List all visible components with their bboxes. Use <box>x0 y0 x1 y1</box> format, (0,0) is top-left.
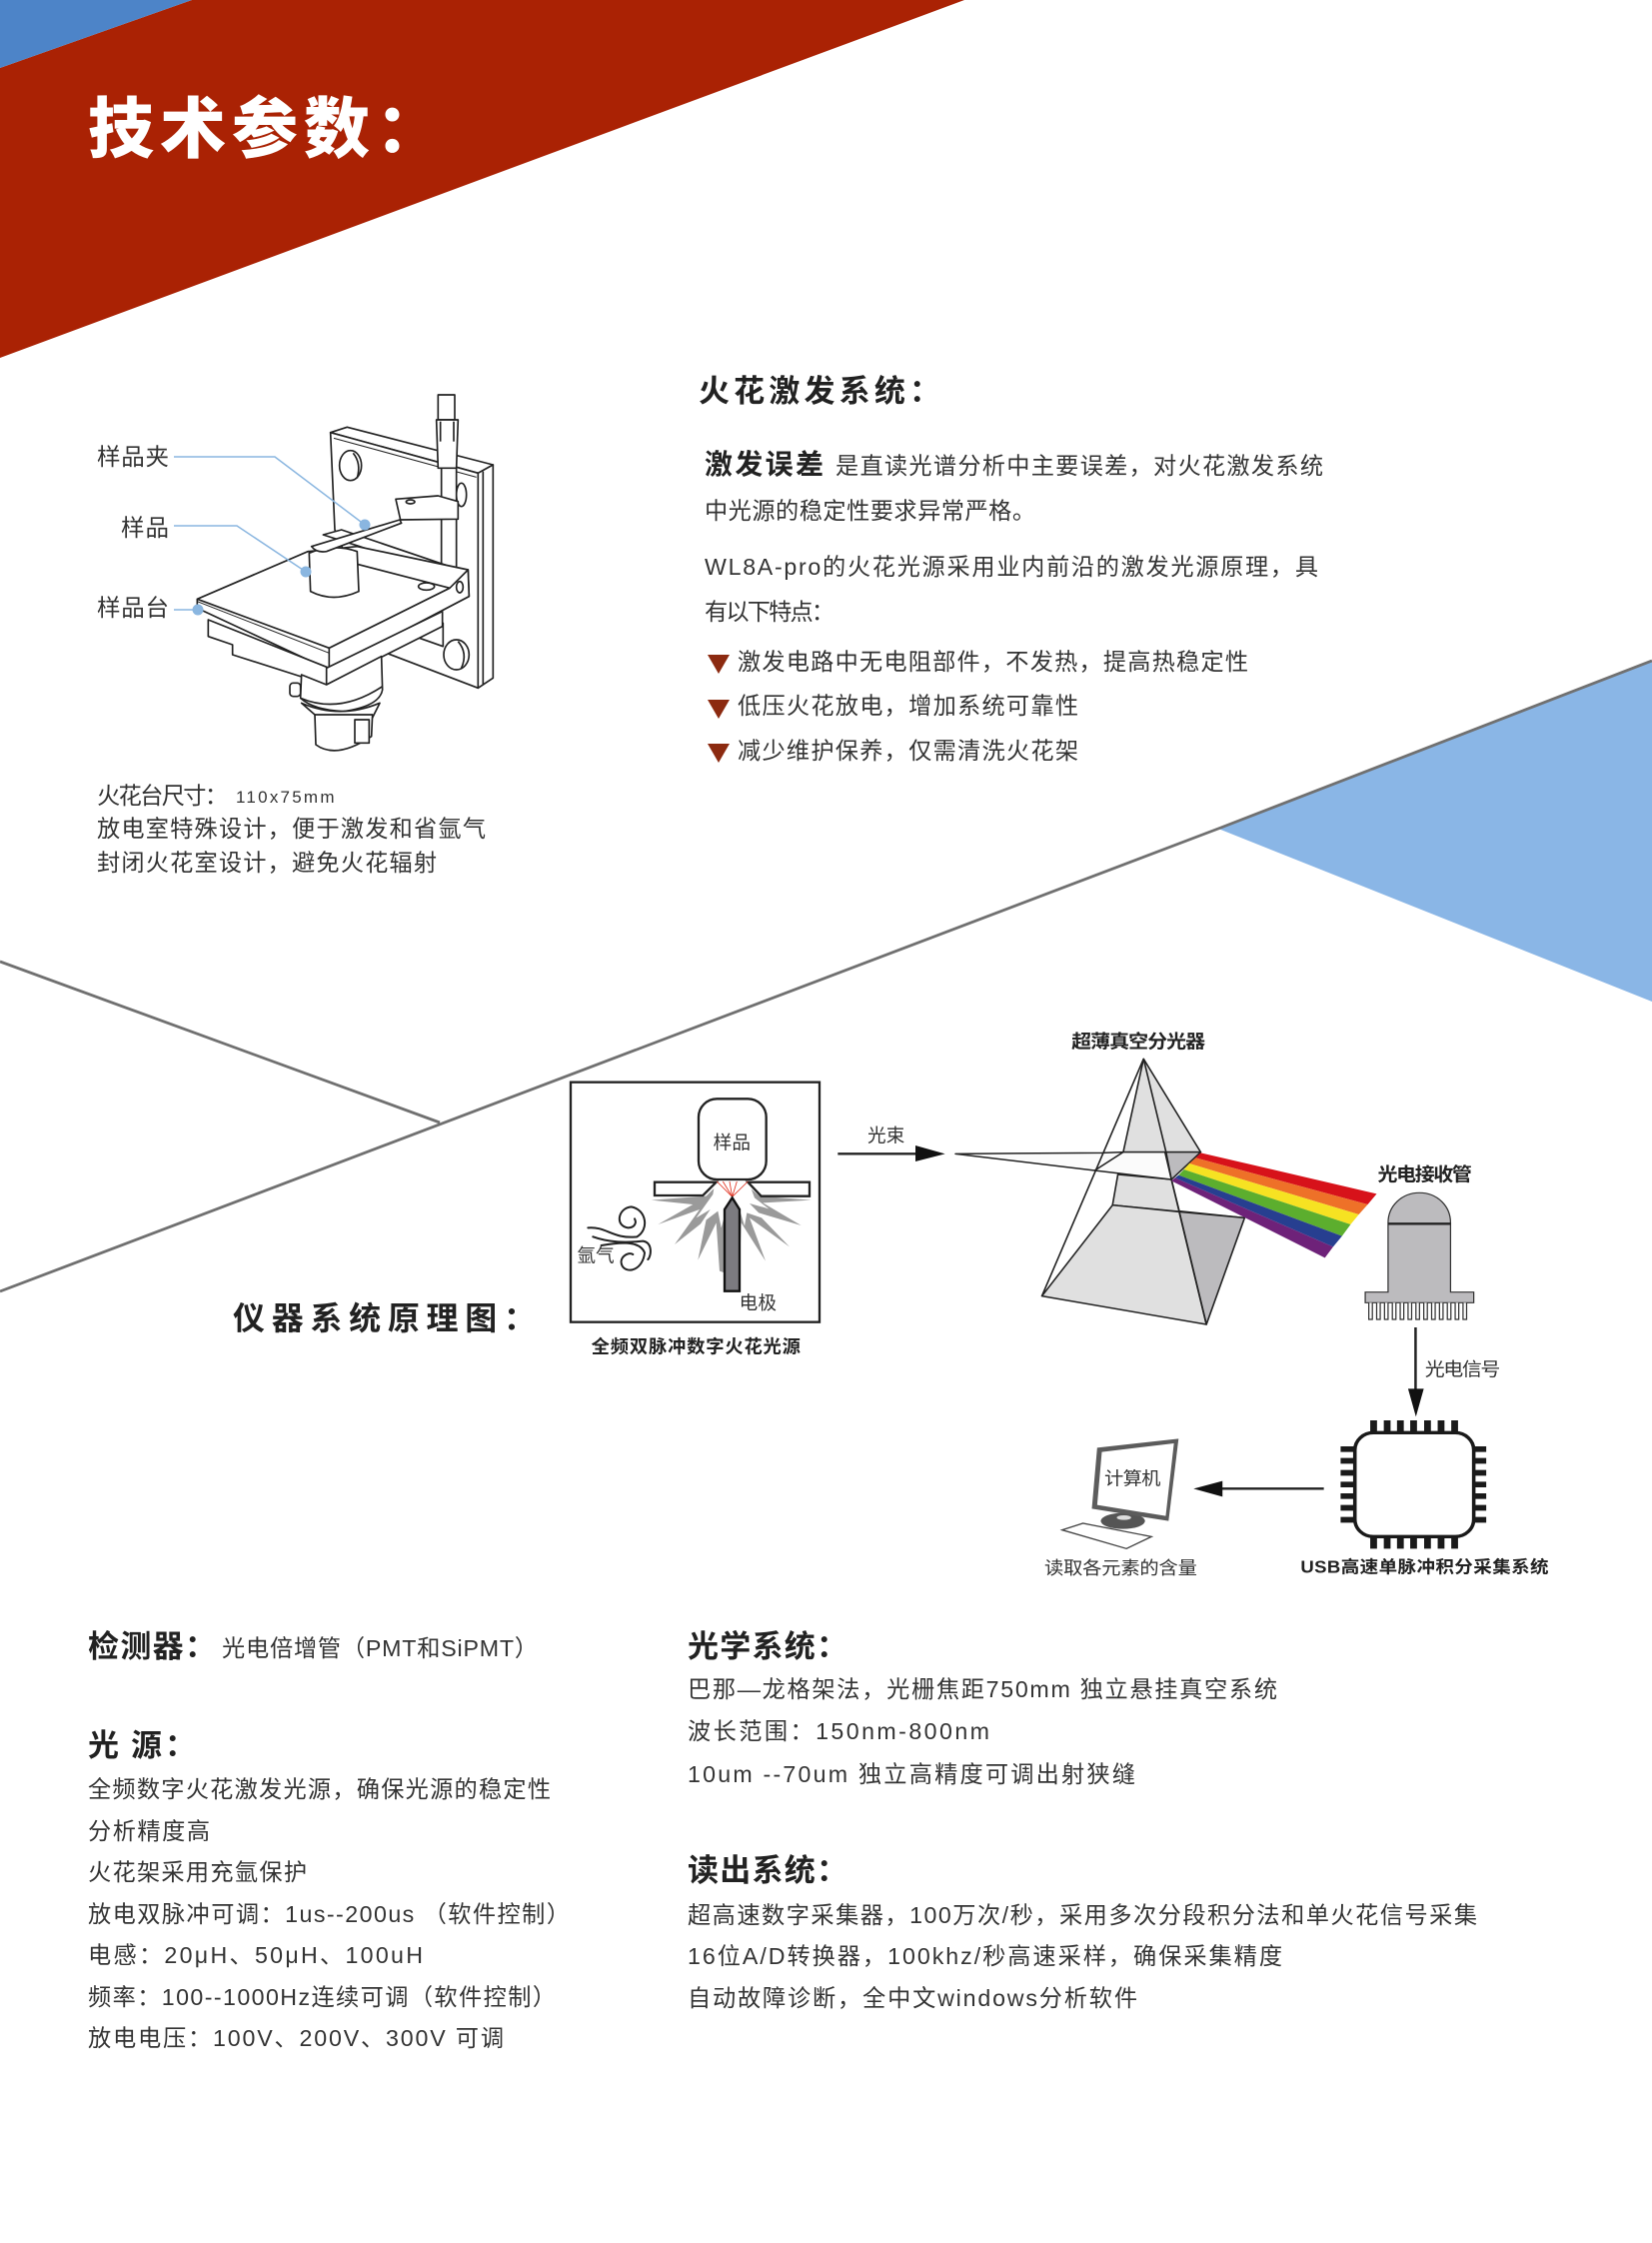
text block: readout: 超高速数字采集器，100万次/秒，采用多次分段积分法和单火花信号采集 <box>688 1902 1477 1928</box>
heading: light source: 光源： <box>88 1728 196 1763</box>
panel: detector and light source specs <box>88 1629 570 2051</box>
source box <box>571 1083 820 1322</box>
text block: optics: 巴那—龙格架法，光栅焦距750mm 独立悬挂真空系统 <box>688 1676 1277 1702</box>
text block: light source: 全频数字火花激发光源，确保光源的稳定性 <box>88 1776 551 1802</box>
panel: spark source <box>571 1083 820 1357</box>
arrow: to computer <box>1193 1481 1324 1496</box>
text block: intro: 有以下特点： <box>705 599 834 625</box>
callout: sample stage: 样品台 <box>97 595 169 621</box>
arrow: light beam <box>837 1125 945 1161</box>
callout: sample stage <box>97 595 204 621</box>
arrow: light beam: 光束 <box>867 1125 905 1146</box>
panel: optical and readout specs <box>688 1629 1477 2011</box>
argon gas: 氩气 <box>577 1245 615 1266</box>
background shapes <box>0 0 1652 1291</box>
text block: light source: 电感：20μH、50μH、100uH <box>88 1942 423 1968</box>
text block: intro: 是直读光谱分析中主要误差，对火花激发系统 <box>835 453 1323 479</box>
text block: light source <box>88 1776 570 2051</box>
computer <box>1044 1438 1197 1578</box>
rainbow <box>1171 1152 1376 1257</box>
text block: light source: 火花架采用充氩保护 <box>88 1859 307 1885</box>
heading: readout: 读出系统： <box>688 1853 847 1888</box>
title: 技术参数： <box>88 92 442 166</box>
arrow: photoelectric signal <box>1408 1327 1500 1416</box>
computer: 读取各元素的含量 <box>1044 1558 1197 1578</box>
argon gas <box>577 1206 651 1270</box>
caption: spark stand specs: 放电室特殊设计，便于激发和省氩气 <box>97 816 486 842</box>
text block: light source: 放电电压：100V、200V、300V 可调 <box>88 2025 504 2051</box>
list: features: 激发电路中无电阻部件，不发热，提高热稳定性 <box>738 649 1248 675</box>
caption: spark stand specs: 110x75mm <box>236 788 336 807</box>
electrode: 电极 <box>740 1292 777 1313</box>
prism <box>955 1059 1244 1324</box>
chip: USB高速单脉冲积分采集系统 <box>1300 1556 1549 1576</box>
caption: spark stand specs <box>97 783 486 876</box>
text block: readout: 16位A/D转换器，100khz/秒高速采样，确保采集精度 <box>688 1943 1282 1969</box>
text block: intro: WL8A-pro的火花光源采用业内前沿的激发光源原理，具 <box>705 554 1318 580</box>
chip <box>1300 1420 1549 1576</box>
text block: readout <box>688 1902 1477 2011</box>
prism heading: 超薄真空分光器 <box>1071 1031 1206 1053</box>
heading: 火花激发系统： <box>699 374 940 409</box>
heading: detector: 检测器： <box>88 1629 216 1664</box>
list: features: 减少维护保养，仅需清洗火花架 <box>738 738 1078 764</box>
text block: intro: 中光源的稳定性要求异常严格。 <box>705 498 1035 524</box>
text block: intro <box>705 449 1323 625</box>
caption: spark stand specs: 火花台尺寸： <box>97 783 228 809</box>
text block: readout: 自动故障诊断，全中文windows分析软件 <box>688 1985 1137 2011</box>
detector: 光电接收管 <box>1378 1163 1472 1185</box>
text block: light source: 分析精度高 <box>88 1818 210 1844</box>
callout: sample clamp <box>97 444 370 530</box>
list: features <box>708 649 1248 764</box>
panel: spectrometer prism <box>955 1031 1474 1324</box>
source label: 全频双脉冲数字火花光源 <box>592 1336 802 1357</box>
text: detector type: 光电倍增管（PMT和SiPMT） <box>222 1635 538 1661</box>
sample block <box>699 1099 767 1179</box>
list: features: 低压火花放电，增加系统可靠性 <box>738 693 1078 719</box>
spark rays <box>717 1181 748 1196</box>
arrow: photoelectric signal: 光电信号 <box>1425 1359 1500 1380</box>
text block: optics: 波长范围：150nm-800nm <box>688 1718 989 1744</box>
text block: optics <box>688 1676 1277 1787</box>
stage plate <box>655 1182 810 1196</box>
spark burst <box>652 1184 812 1272</box>
callout: sample: 样品 <box>121 515 169 541</box>
sample block: 样品 <box>714 1131 751 1152</box>
text block: intro: 激发误差 <box>705 449 824 480</box>
heading: optics: 光学系统： <box>688 1629 847 1664</box>
detector <box>1365 1163 1474 1319</box>
panel: acquisition and computer <box>1044 1327 1549 1578</box>
text block: light source: 放电双脉冲可调：1us--200us （软件控制） <box>88 1901 570 1927</box>
panel: spark excitation system <box>699 374 1323 764</box>
heading: system diagram: 仪器系统原理图： <box>233 1300 536 1336</box>
electrode <box>725 1197 777 1313</box>
caption: spark stand specs: 封闭火花室设计，避免火花辐射 <box>97 850 437 876</box>
illustration: spark stand <box>197 395 493 751</box>
callout: sample clamp: 样品夹 <box>97 444 169 470</box>
text block: light source: 频率：100--1000Hz连续可调（软件控制） <box>88 1984 556 2010</box>
text block: optics: 10um --70um 独立高精度可调出射狭缝 <box>688 1761 1135 1787</box>
panel: spark stand diagram <box>97 395 493 751</box>
computer: 计算机 <box>1104 1468 1161 1489</box>
callout: sample <box>121 515 312 578</box>
